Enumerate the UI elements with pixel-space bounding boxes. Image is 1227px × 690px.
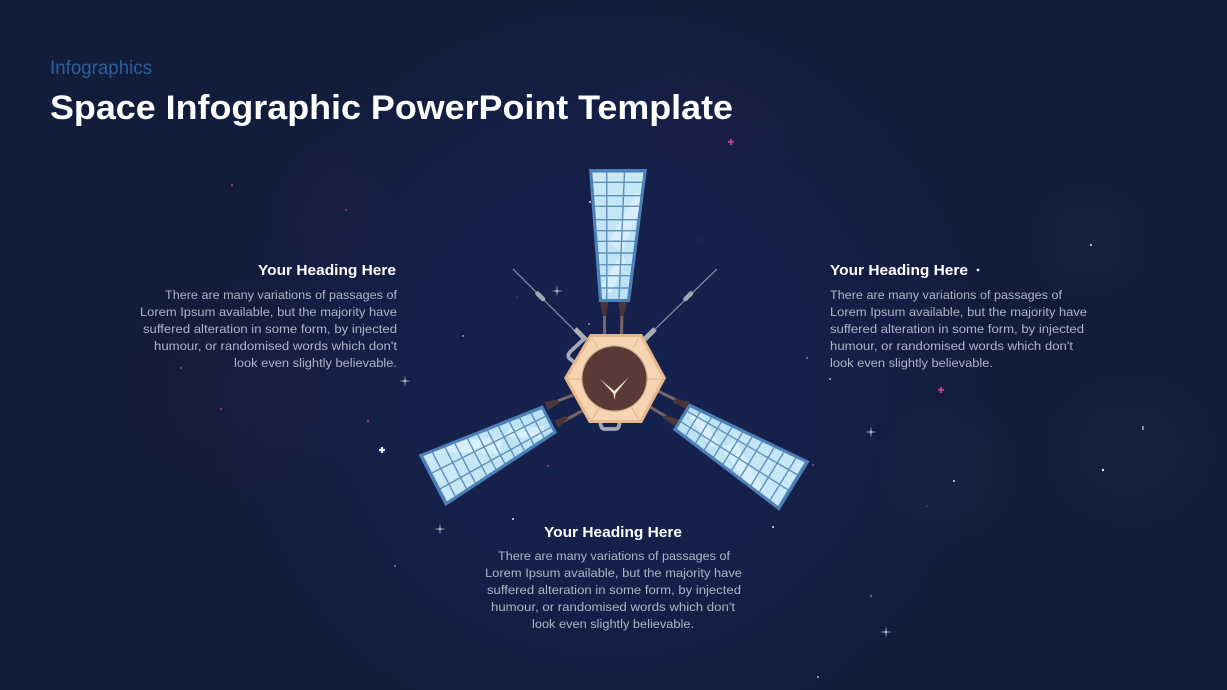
- text block: left: There are many variations of passages of: [165, 288, 398, 302]
- title: Space Infographic PowerPoint Template: [50, 89, 733, 127]
- text block: bottom: Lorem Ipsum available, but the majority have: [485, 566, 742, 580]
- struts: [544, 302, 690, 428]
- text block: right: look even slightly believable.: [830, 356, 993, 370]
- text block: bottom: suffered alteration in some form, by injected: [487, 583, 741, 597]
- text block: left: Your Heading Here: [258, 263, 396, 279]
- satellite: [418, 169, 810, 512]
- text block: left: humour, or randomised words which don't: [154, 339, 398, 353]
- stars: [180, 139, 1144, 678]
- subtitle: Infographics: [50, 58, 152, 79]
- text block: right: suffered alteration in some form, by injected: [830, 322, 1084, 336]
- text block: bottom: Your Heading Here: [544, 525, 682, 541]
- text block: left: suffered alteration in some form, by injected: [143, 322, 397, 336]
- antenna: right: [644, 269, 717, 340]
- solar panel: left: [418, 392, 564, 507]
- text block: left: Lorem Ipsum available, but the majority have: [140, 305, 397, 319]
- antenna: left: [513, 269, 586, 340]
- text block: left: look even slightly believable.: [234, 356, 397, 370]
- hub: [564, 334, 666, 423]
- text block: right: [830, 263, 1087, 370]
- text block: right: Lorem Ipsum available, but the majority have: [830, 305, 1087, 319]
- text block: right: Your Heading Here: [830, 263, 968, 279]
- text block: bottom: There are many variations of passages of: [498, 549, 731, 563]
- text block: bottom: [485, 525, 742, 631]
- handles: [568, 338, 620, 429]
- text block: left: [140, 263, 398, 370]
- solar panel: right: [665, 391, 810, 512]
- text block: right: humour, or randomised words which don't: [830, 339, 1074, 353]
- text block: right: There are many variations of passages of: [830, 288, 1063, 302]
- text block: bottom: humour, or randomised words which don't: [491, 600, 736, 614]
- icon: check mark: [600, 377, 629, 400]
- solar panel: top: [584, 169, 648, 302]
- text block: bottom: look even slightly believable.: [532, 617, 694, 631]
